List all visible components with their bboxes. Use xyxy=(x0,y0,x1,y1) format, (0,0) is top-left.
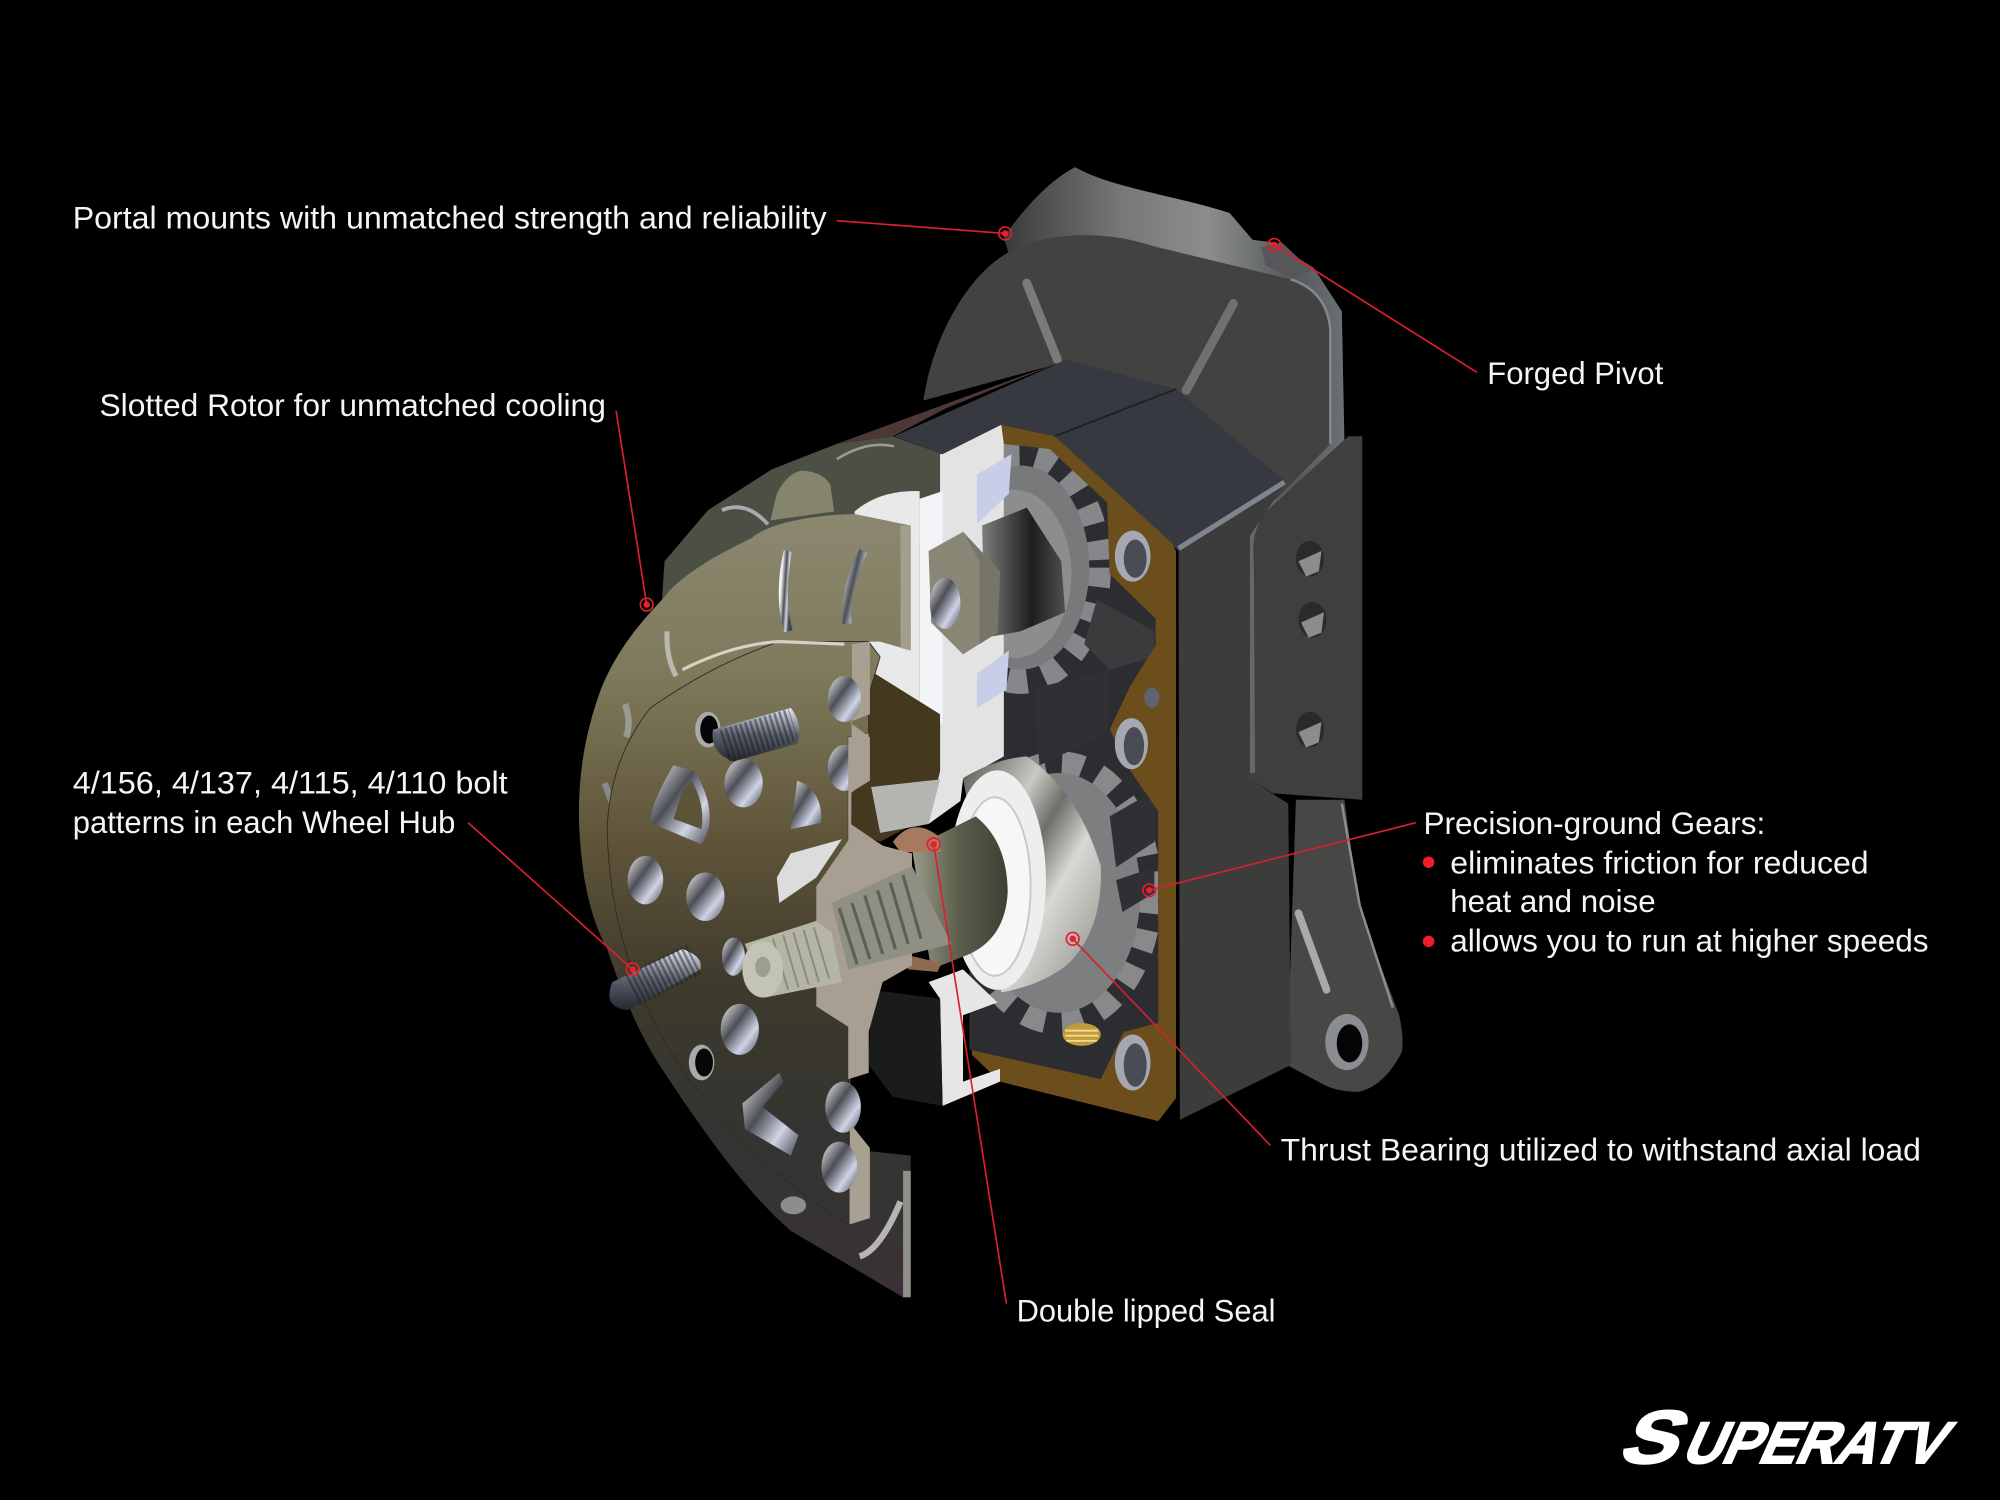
spline ridges xyxy=(839,875,921,964)
callout: portal mounts: Portal mounts with unmatched strength and reliability xyxy=(73,199,827,235)
nut hole xyxy=(930,578,960,629)
pinion shaft xyxy=(1084,599,1154,670)
stud upper threads xyxy=(724,724,793,746)
wheel studs xyxy=(609,708,799,1010)
upper seal xyxy=(977,454,1011,524)
brake caliper xyxy=(662,436,943,599)
upper sleeve and flange xyxy=(982,503,1065,651)
gasket bolt hole small xyxy=(1144,688,1159,708)
callout: precision-ground gears: eliminates friction for reduced xyxy=(1450,845,1869,881)
hub centre cross-section xyxy=(742,733,952,1079)
small hole top xyxy=(695,712,721,747)
lower white housing xyxy=(929,969,1000,1106)
white rear half disc xyxy=(855,491,920,723)
callout: forged pivot xyxy=(1268,239,1663,391)
caliper highlight xyxy=(837,445,894,459)
small hole bottom xyxy=(689,1045,714,1080)
callout: slotted rotor: Slotted Rotor for unmatched cooling xyxy=(99,387,606,423)
lower gear xyxy=(969,765,1148,1020)
rotor lower slot xyxy=(860,1202,901,1256)
lower seal lip xyxy=(903,954,941,972)
white inner wall xyxy=(920,491,943,731)
hub chrome collar xyxy=(777,839,842,903)
strip between rotor and housing xyxy=(837,360,1066,444)
small hole lower xyxy=(781,1196,806,1214)
logo: SuperATV: S xyxy=(1609,1395,1704,1479)
rotor lower edge xyxy=(903,1171,911,1297)
portal mount xyxy=(923,167,1344,523)
bracket rim xyxy=(1249,520,1256,773)
gear compartment xyxy=(969,444,1158,1079)
gasket bolt hole bottom xyxy=(1115,1034,1151,1091)
void behind hub xyxy=(848,657,940,842)
bolt holes xyxy=(628,676,861,1193)
logo: SuperATV xyxy=(1609,1395,1969,1479)
stud lower xyxy=(609,949,701,1010)
callout: precision-ground gears: Precision-ground Gears: xyxy=(1423,805,1765,841)
mount rib left xyxy=(1027,283,1057,360)
callout: precision-ground gears: heat and noise xyxy=(1450,883,1656,919)
gearbox housing xyxy=(837,360,1291,1120)
thrust bearing xyxy=(949,756,1101,992)
callout: double lipped seal: Double lipped Seal xyxy=(1017,1292,1276,1328)
housing seam xyxy=(1055,389,1176,436)
callout: thrust bearing xyxy=(1066,932,1921,1168)
bracket slot xyxy=(1298,913,1327,990)
white cutaway housing xyxy=(920,425,1011,1106)
bearing white face xyxy=(949,770,1046,990)
callout: precision-ground gears xyxy=(1143,805,1929,959)
stud lower threads xyxy=(633,959,694,990)
callout: bolt patterns xyxy=(73,764,639,976)
bearing outer xyxy=(963,756,1101,992)
lower bracket xyxy=(1287,800,1403,1092)
slot 4 xyxy=(625,704,629,737)
forged pivot xyxy=(1261,242,1311,278)
hole 2 xyxy=(1298,602,1327,638)
callout: forged pivot: Forged Pivot xyxy=(1487,355,1663,391)
slot 2 xyxy=(847,551,864,624)
gear dark slots xyxy=(1033,670,1154,912)
housing top faces xyxy=(894,360,1284,551)
housing chamfer highlight xyxy=(1179,482,1284,548)
bearing inner ring xyxy=(959,797,1031,976)
rotor sector edge xyxy=(901,526,911,651)
hex nut xyxy=(929,532,1000,654)
dark void under hub xyxy=(869,990,943,1106)
mount top fin xyxy=(1004,167,1344,523)
slotted rotor xyxy=(579,514,911,1297)
gasket bolt hole middle xyxy=(1115,718,1148,769)
gold fitting xyxy=(1062,1023,1101,1046)
mount edge highlight xyxy=(1291,279,1330,444)
callout: precision-ground gears: allows you to run at higher speeds xyxy=(1450,923,1929,959)
threaded tip xyxy=(745,921,842,997)
triangular slot right xyxy=(791,781,822,829)
mount face plate xyxy=(923,235,1330,500)
slot 5 xyxy=(605,783,612,804)
triangular slot inner xyxy=(673,781,702,829)
callout: bolt patterns: patterns in each Wheel Hub xyxy=(73,804,455,840)
hole 3 xyxy=(1296,712,1324,747)
callout: thrust bearing: Thrust Bearing utilized to withstand axial load xyxy=(1281,1132,1921,1168)
bracket edge xyxy=(1342,804,1393,1008)
hub stepped edge xyxy=(849,642,870,1224)
shaft nose xyxy=(742,941,783,997)
bracket eye hole xyxy=(1325,1014,1369,1070)
slot 3 xyxy=(667,631,676,676)
triangular slot left xyxy=(651,765,710,844)
gasket xyxy=(969,425,1176,1121)
kidney slot bottom xyxy=(742,1073,798,1156)
upper gear xyxy=(1004,444,1111,694)
mount rib right xyxy=(1186,304,1233,390)
caliper piston arc xyxy=(722,507,768,524)
splined shaft xyxy=(832,866,952,969)
upper bracket with holes xyxy=(1249,436,1362,800)
hole 1 xyxy=(1296,541,1324,577)
output shaft xyxy=(893,816,1008,972)
lower seal xyxy=(977,651,1009,708)
wheel hub plate xyxy=(607,642,880,1224)
callout: slotted rotor xyxy=(99,387,653,611)
callout: double lipped seal xyxy=(927,838,1276,1328)
double lipped seal xyxy=(893,827,941,852)
caliper pad xyxy=(770,471,834,520)
callout: bolt patterns: 4/156, 4/137, 4/115, 4/110 bolt xyxy=(73,764,508,800)
slot 1 xyxy=(783,551,788,631)
stud upper xyxy=(712,708,799,761)
hub top highlight xyxy=(682,642,844,670)
chrome block behind hub xyxy=(871,779,940,833)
gasket bolt hole top xyxy=(1115,531,1151,582)
logo: SuperATV: UPERATV xyxy=(1674,1411,1962,1476)
thread lines xyxy=(773,927,829,990)
gears xyxy=(944,455,1154,1020)
housing side face xyxy=(1179,485,1291,1120)
